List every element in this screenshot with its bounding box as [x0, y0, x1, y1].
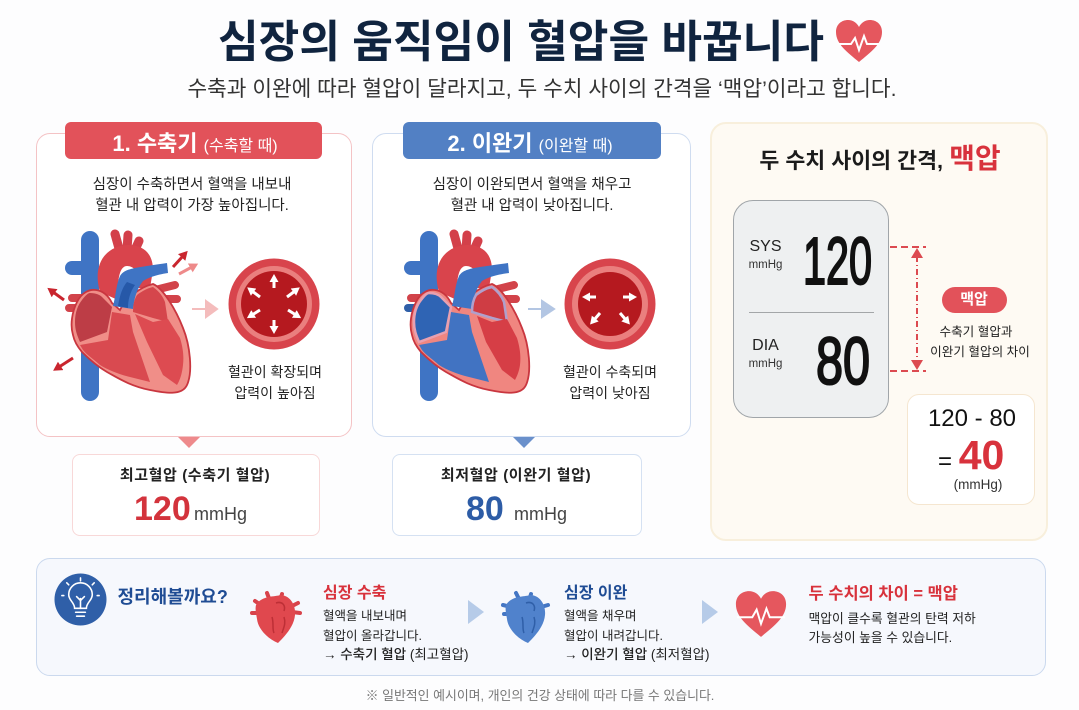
heading: diastole	[403, 122, 661, 159]
step: pulse pressure	[808, 584, 976, 644]
value box: systolic pressure: mmHg	[194, 504, 247, 524]
caption: systole vessel: 혈관이 확장되며	[228, 364, 322, 380]
caption: diastole vessel: 혈관이 수축되며	[563, 364, 657, 380]
pointer: diastole	[513, 437, 535, 448]
panel: systole	[36, 122, 352, 536]
arrow: heart to vessel	[528, 301, 554, 317]
icon: red heart	[250, 590, 302, 643]
description: systole	[93, 176, 291, 214]
step: diastole	[564, 584, 710, 662]
step: systole	[323, 584, 469, 662]
icon: light bulb	[54, 574, 106, 626]
label: SYS: SYS	[749, 238, 782, 254]
result: 40: = 40	[938, 432, 1004, 478]
heart: systole	[69, 234, 190, 393]
description: systole: 혈관 내 압력이 가장 높아집니다.	[95, 198, 289, 214]
bracket: pressure gap	[890, 246, 926, 372]
step: systole: 혈압이 올라갑니다.	[323, 628, 422, 642]
description: pulse pressure	[930, 325, 1030, 359]
heading: systole	[65, 122, 322, 159]
value box: systolic pressure: 최고혈압 (수축기 혈압)	[120, 466, 270, 484]
arrow: step 1 to 2	[468, 600, 484, 624]
caption: diastole vessel: 압력이 낮아짐	[569, 385, 651, 401]
unit: (mmHg)	[954, 477, 1002, 492]
label: DIA unit: mmHg	[749, 358, 782, 370]
heading: diastole: 2. 이완기 (이완할 때)	[447, 130, 613, 156]
arrow: heart to vessel	[192, 301, 217, 317]
step: pulse pressure: 맥압이 클수록 혈관의 탄력 저하	[808, 610, 976, 626]
vessel: narrowed	[564, 258, 656, 350]
label: SYS unit: mmHg	[749, 258, 782, 270]
icon: heart with pulse	[736, 591, 786, 637]
illustration: relaxing heart and narrowed vessel	[404, 230, 656, 401]
step: pulse pressure: 두 수치의 차이 = 맥압	[808, 585, 958, 603]
step: diastole: 혈액을 채우며	[564, 608, 636, 622]
label: DIA: DIA	[752, 336, 779, 354]
panel: pulse pressure	[710, 122, 1048, 541]
panel: summary	[36, 558, 1046, 676]
caption: diastole vessel	[563, 364, 657, 401]
heading: pulse pressure: 두 수치 사이의 간격, 맥압	[759, 143, 1001, 174]
value box: diastolic pressure	[392, 454, 642, 536]
heading: systole: 1. 수축기 (수축할 때)	[112, 130, 278, 156]
result box	[907, 394, 1035, 505]
caption: systole vessel: 압력이 높아짐	[234, 385, 316, 401]
value box: diastolic pressure: 최저혈압 (이완기 혈압)	[441, 466, 591, 484]
description: diastole: 혈관 내 압력이 낮아집니다.	[451, 198, 613, 214]
arrows: pressure outflow	[53, 256, 192, 367]
value box: diastolic pressure: 80	[466, 490, 504, 528]
monitor display	[733, 200, 889, 418]
step: systole: → 수축기 혈압 (최고혈압)	[323, 646, 469, 662]
footnote: ※ 일반적인 예시이며, 개인의 건강 상태에 따라 다를 수 있습니다.	[366, 688, 714, 702]
value box: diastolic pressure: mmHg	[514, 504, 567, 524]
step: diastole: 심장 이완	[564, 585, 627, 602]
description: diastole	[433, 176, 631, 214]
step: systole: 심장 수축	[323, 585, 386, 602]
reading: 120: 120	[803, 224, 872, 298]
subtitle: 수축과 이완에 따라 혈압이 달라지고, 두 수치 사이의 간격을 ‘맥압’이라고 합니다.	[187, 77, 897, 101]
arrow: step 2 to 3	[702, 600, 718, 624]
description: pulse pressure: 수축기 혈압과	[939, 325, 1013, 339]
divider	[748, 312, 874, 313]
reading: 80: 80	[816, 325, 870, 399]
heart: diastole	[408, 234, 529, 393]
step: diastole: 혈압이 내려갑니다.	[564, 628, 663, 642]
pill: pulse pressure	[942, 287, 1007, 313]
step: pulse pressure: 가능성이 높을 수 있습니다.	[808, 630, 952, 644]
calculation: 120 - 80	[928, 405, 1016, 432]
summary heading: 정리해볼까요?	[118, 586, 228, 606]
value box: systolic pressure	[72, 454, 320, 536]
description: systole: 심장이 수축하면서 혈액을 내보내	[93, 176, 291, 192]
value box: systolic pressure: 120	[134, 490, 191, 528]
title: 심장의 움직임이 혈압을 바꿉니다	[218, 18, 824, 67]
description: pulse pressure: 이완기 혈압의 차이	[930, 345, 1030, 359]
vessel: dilated	[228, 258, 320, 350]
icon: blue heart	[500, 590, 550, 643]
illustration: contracting heart and dilated vessel	[47, 230, 320, 401]
caption: systole vessel	[228, 364, 322, 401]
step: systole: 혈액을 내보내며	[323, 608, 407, 622]
icon: title heart	[836, 20, 882, 62]
step: diastole: → 이완기 혈압 (최저혈압)	[564, 646, 710, 662]
panel: diastole	[372, 122, 691, 536]
pill: pulse pressure: 맥압	[960, 291, 988, 308]
description: diastole: 심장이 이완되면서 혈액을 채우고	[433, 176, 631, 192]
pointer: systole	[178, 437, 200, 448]
